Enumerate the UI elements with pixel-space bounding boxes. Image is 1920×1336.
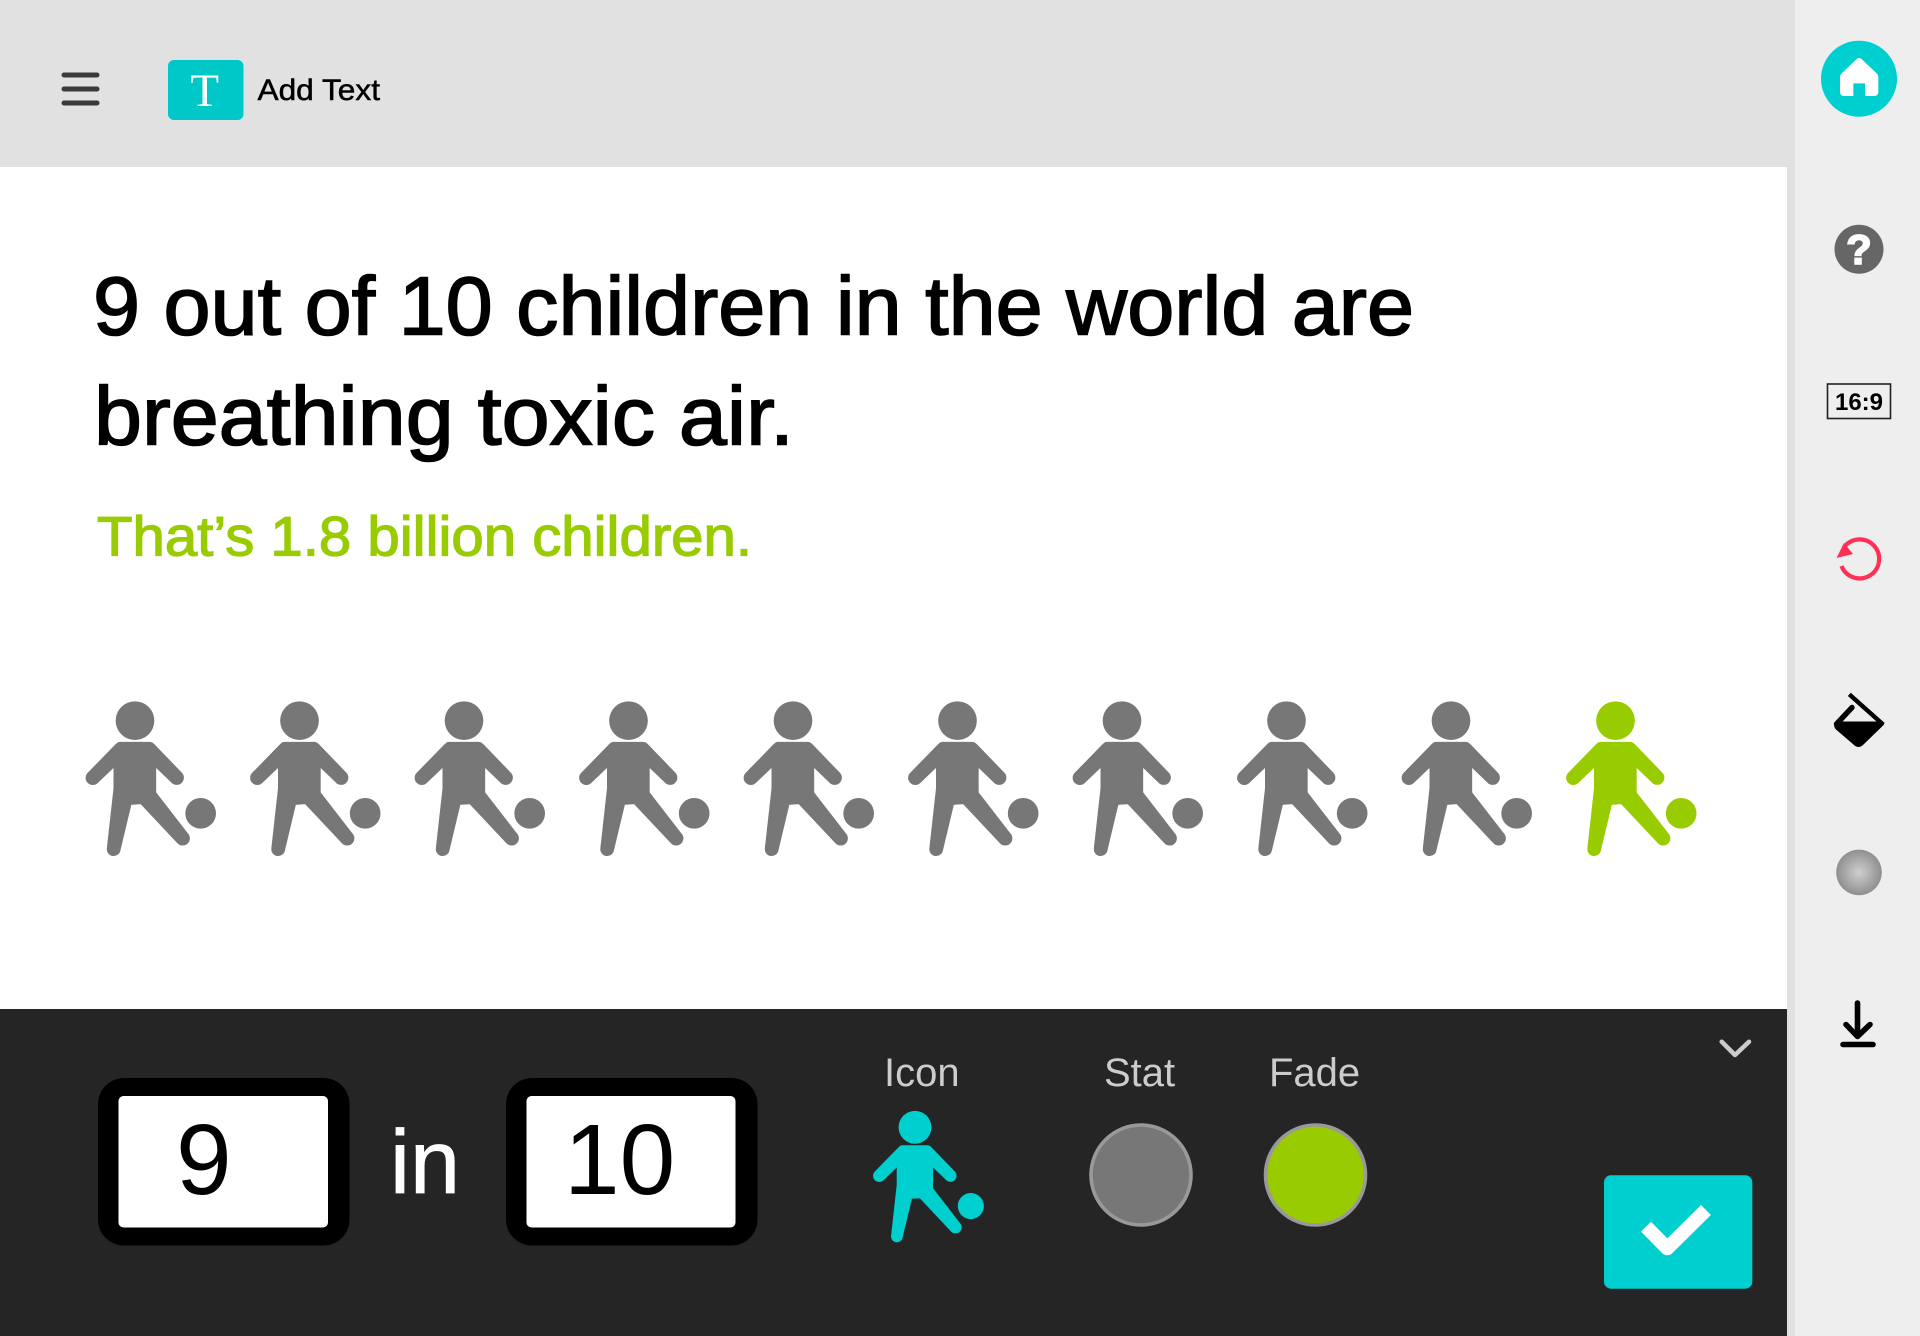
input: stat number 10: 10 bbox=[564, 1104, 675, 1216]
icon: reset bbox=[1836, 539, 1879, 578]
label: fade: Fade bbox=[1269, 1051, 1360, 1095]
icon: help bbox=[1834, 225, 1884, 274]
icon: child 1 grey bbox=[86, 701, 216, 855]
heading: main headline bbox=[93, 260, 1414, 462]
icon: 16:9 aspect ratio: 16:9 bbox=[1835, 389, 1883, 416]
panel: right sidebar bbox=[1787, 0, 1920, 1336]
icon: help: ? bbox=[1846, 226, 1872, 273]
icon: child 3 grey bbox=[415, 701, 545, 855]
icon: child 10 green bbox=[1567, 701, 1696, 855]
swatch: fade colour bbox=[1266, 1125, 1366, 1225]
icon: child 5 grey bbox=[744, 701, 874, 855]
button: confirm bbox=[1604, 1175, 1752, 1289]
icon: home bbox=[1821, 41, 1897, 117]
button: add text icon: T bbox=[190, 65, 219, 117]
icon: gradient sphere bbox=[1836, 850, 1882, 895]
heading: main headline: 9 out of 10 children in the world are bbox=[93, 260, 1414, 352]
chart: row of ten child icons bbox=[86, 701, 1696, 855]
panel: bottom controls bbox=[0, 1009, 1787, 1336]
swatch: stat colour bbox=[1091, 1125, 1191, 1225]
input: stat number 10 bbox=[506, 1078, 758, 1246]
icon: child 2 grey bbox=[251, 701, 380, 855]
icon: download bbox=[1843, 1003, 1873, 1044]
icon: paint bucket bbox=[1834, 694, 1884, 747]
icon: child 6 grey bbox=[909, 701, 1038, 855]
icon: child 8 grey bbox=[1238, 701, 1367, 855]
subheading: 1.8 billion children: That’s 1.8 billion children. bbox=[97, 505, 752, 568]
icon: collapse chevron bbox=[1722, 1042, 1749, 1055]
label: icon: Icon bbox=[884, 1051, 960, 1095]
icon: child 9 grey bbox=[1402, 701, 1532, 855]
input: stat number 9: 9 bbox=[176, 1104, 232, 1216]
icon: hamburger menu bbox=[62, 72, 100, 106]
icon: child 7 grey bbox=[1073, 701, 1203, 855]
button: add text icon bbox=[168, 60, 244, 120]
label: stat: Stat bbox=[1104, 1051, 1175, 1095]
icon: selected child bbox=[874, 1111, 984, 1242]
label: add text: Add Text bbox=[258, 74, 381, 107]
icon: 16:9 aspect ratio bbox=[1828, 384, 1890, 418]
panel: top toolbar bbox=[0, 0, 1795, 167]
input: stat number 9 bbox=[98, 1078, 350, 1246]
icon: child 4 grey bbox=[580, 701, 709, 855]
heading: main headline: breathing toxic air. bbox=[94, 370, 794, 462]
label: in: in bbox=[390, 1113, 460, 1213]
